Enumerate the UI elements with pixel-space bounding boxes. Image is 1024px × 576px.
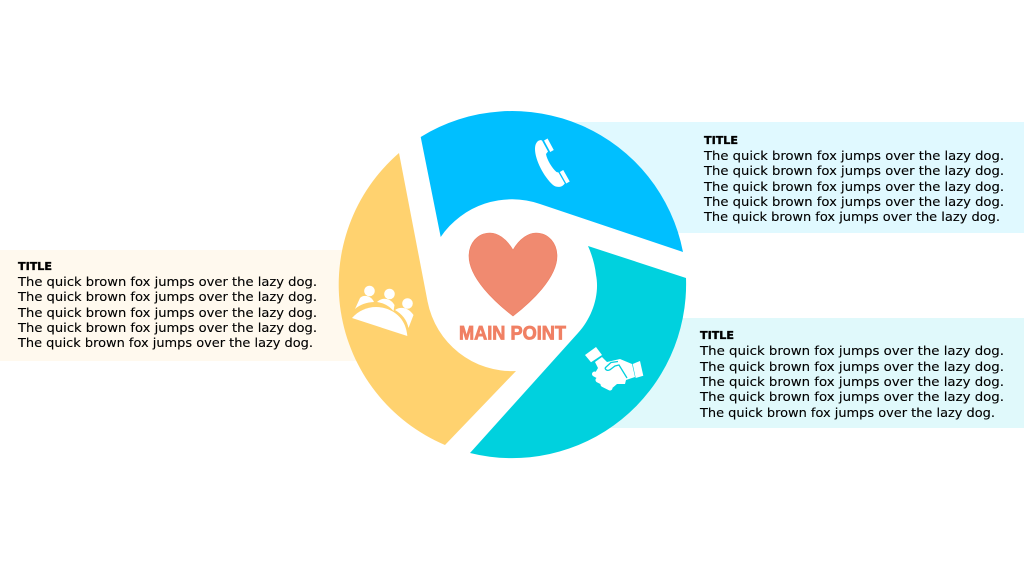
text block: left: The quick brown fox jumps over the lazy dog. (17, 305, 317, 320)
panel: top right text band (570, 122, 1024, 233)
segment: teal (470, 246, 686, 458)
icon: handshake (585, 347, 643, 390)
text block: top right (703, 135, 1004, 224)
icon: people around a table (352, 286, 414, 336)
text block: lower right (699, 330, 1004, 420)
text block: left: TITLE (18, 261, 52, 273)
segment: yellow (339, 153, 516, 445)
icon: heart (469, 233, 557, 316)
text block: lower right: The quick brown fox jumps over the lazy dog. (699, 343, 1004, 358)
text block: left: The quick brown fox jumps over the lazy dog. (17, 335, 313, 350)
text block: top right: The quick brown fox jumps over the lazy dog. (703, 148, 1004, 163)
text block: lower right: The quick brown fox jumps over the lazy dog. (699, 389, 1004, 404)
heading: main point: MAIN POINT (459, 324, 566, 344)
text block: top right: The quick brown fox jumps over the lazy dog. (703, 209, 1000, 224)
text block: lower right: The quick brown fox jumps over the lazy dog. (699, 359, 1004, 374)
text block: lower right: The quick brown fox jumps over the lazy dog. (699, 374, 1004, 389)
text block: left: The quick brown fox jumps over the lazy dog. (17, 289, 317, 304)
text block: top right: The quick brown fox jumps over the lazy dog. (703, 179, 1004, 194)
text block: top right: The quick brown fox jumps over the lazy dog. (703, 163, 1004, 178)
text block: left: The quick brown fox jumps over the lazy dog. (17, 320, 317, 335)
panel: left text band (0, 250, 370, 361)
text block: left (17, 261, 317, 350)
text block: lower right: The quick brown fox jumps over the lazy dog. (699, 405, 995, 420)
text block: lower right: TITLE (700, 330, 734, 342)
text block: left: The quick brown fox jumps over the lazy dog. (17, 274, 317, 289)
panel: lower right text band (600, 318, 1024, 428)
segment: blue (421, 111, 683, 252)
text block: top right: The quick brown fox jumps over the lazy dog. (703, 194, 1004, 209)
icon: telephone (535, 140, 568, 187)
text block: top right: TITLE (704, 135, 738, 147)
